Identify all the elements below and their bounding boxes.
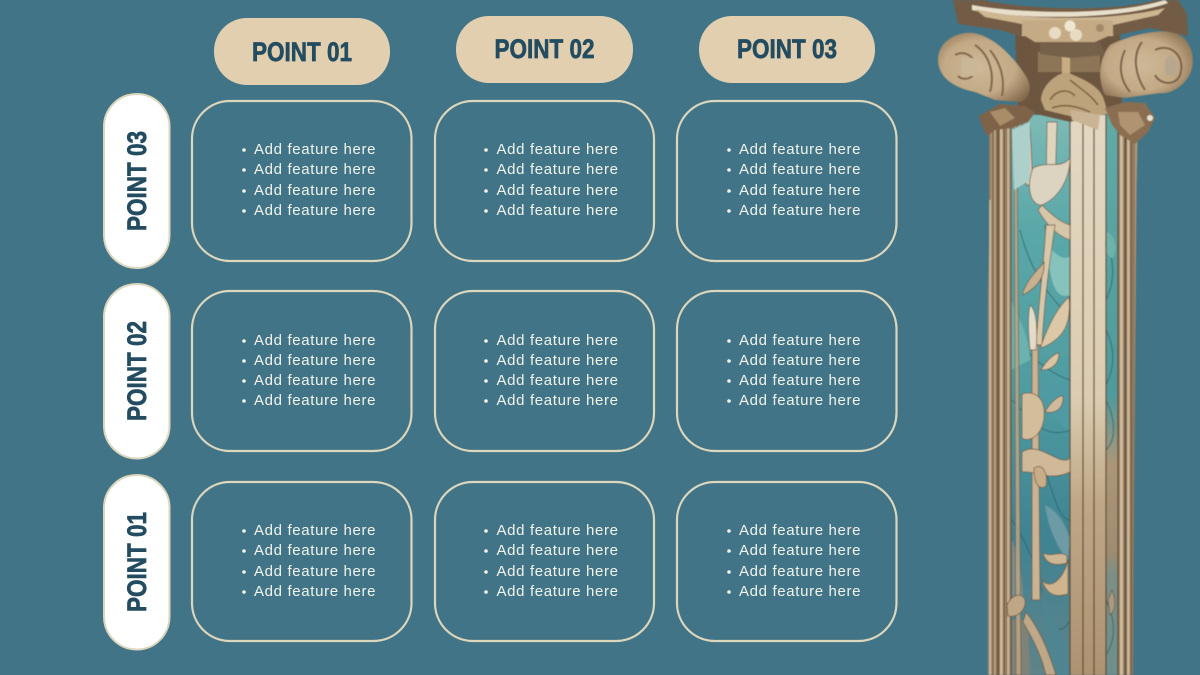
column shaft (988, 115, 1138, 675)
card: row 3 column 2: Add feature here (496, 583, 618, 600)
abacus (953, 0, 1188, 36)
card: row 2 column 1: Add feature here (254, 352, 376, 369)
card: row 2 column 3: Add feature here (739, 372, 860, 389)
card: row 2 column 2: Add feature here (496, 372, 618, 389)
card: row 2 column 1: Add feature here (254, 392, 376, 409)
card: row 3 column 2 (435, 482, 654, 641)
card: row 1 column 3: Add feature here (739, 161, 860, 178)
right volute (1100, 31, 1193, 98)
card: row 1 column 2: Add feature here (496, 182, 618, 199)
card: row 2 column 3 (677, 291, 896, 451)
column header: point 03: POINT 03 (737, 34, 837, 64)
card: row 1 column 3: Add feature here (739, 202, 860, 219)
card: row 2 column 1 (192, 291, 412, 451)
card: row 1 column 1: Add feature here (254, 202, 376, 219)
row header: point 03 (104, 94, 170, 268)
card: row 3 column 2: Add feature here (496, 522, 618, 539)
center block (1015, 30, 1122, 122)
leaf and vine decoration (1007, 122, 1115, 675)
vertical flute lines (993, 115, 1131, 675)
card: row 1 column 2: Add feature here (496, 161, 618, 178)
column capital (938, 0, 1193, 144)
card: row 2 column 2 (435, 291, 654, 451)
card: row 3 column 3 (677, 482, 896, 641)
stained glass cells (1011, 225, 1114, 655)
card: row 3 column 1: Add feature here (254, 542, 376, 559)
column header: point 01 (214, 18, 390, 85)
card: row 2 column 2: Add feature here (496, 352, 618, 369)
card: row 2 column 1: Add feature here (254, 372, 376, 389)
card: row 3 column 2: Add feature here (496, 563, 618, 580)
row header: point 02: POINT 02 (122, 321, 152, 421)
leaf clusters below volutes (979, 104, 1035, 136)
column header: point 02: POINT 02 (494, 34, 594, 64)
card: row 3 column 1 (192, 482, 412, 641)
light teal glass patches (1011, 232, 1115, 675)
row header: point 01: POINT 01 (122, 512, 152, 612)
card: row 1 column 2 (435, 101, 654, 261)
card: row 3 column 1: Add feature here (254, 522, 376, 539)
row header: point 03: POINT 03 (122, 131, 152, 231)
card: row 3 column 1: Add feature here (254, 583, 376, 600)
column header: point 02 (456, 16, 633, 83)
card: row 1 column 2: Add feature here (496, 202, 618, 219)
card: row 2 column 3: Add feature here (739, 332, 860, 349)
card: row 2 column 2: Add feature here (496, 392, 618, 409)
card: row 3 column 3: Add feature here (739, 522, 860, 539)
left volute (938, 33, 1030, 102)
card: row 3 column 1: Add feature here (254, 563, 376, 580)
card: row 3 column 2: Add feature here (496, 542, 618, 559)
card: row 2 column 1: Add feature here (254, 332, 376, 349)
card: row 1 column 2: Add feature here (496, 141, 618, 158)
row header: point 01 (104, 475, 170, 650)
card: row 1 column 1: Add feature here (254, 161, 376, 178)
card: row 1 column 1 (192, 101, 412, 261)
card: row 1 column 3: Add feature here (739, 182, 860, 199)
card: row 1 column 1: Add feature here (254, 141, 376, 158)
card: row 2 column 2: Add feature here (496, 332, 618, 349)
card: row 2 column 3: Add feature here (739, 392, 860, 409)
card: row 3 column 3: Add feature here (739, 583, 860, 600)
card: row 1 column 1: Add feature here (254, 182, 376, 199)
card: row 1 column 3 (677, 101, 896, 261)
card: row 1 column 3: Add feature here (739, 141, 860, 158)
column header: point 03 (699, 16, 875, 83)
column header: point 01: POINT 01 (252, 37, 352, 67)
card: row 3 column 3: Add feature here (739, 542, 860, 559)
card: row 3 column 3: Add feature here (739, 563, 860, 580)
row header: point 02 (104, 284, 170, 458)
illustration: ornate column (938, 0, 1193, 675)
card: row 2 column 3: Add feature here (739, 352, 860, 369)
